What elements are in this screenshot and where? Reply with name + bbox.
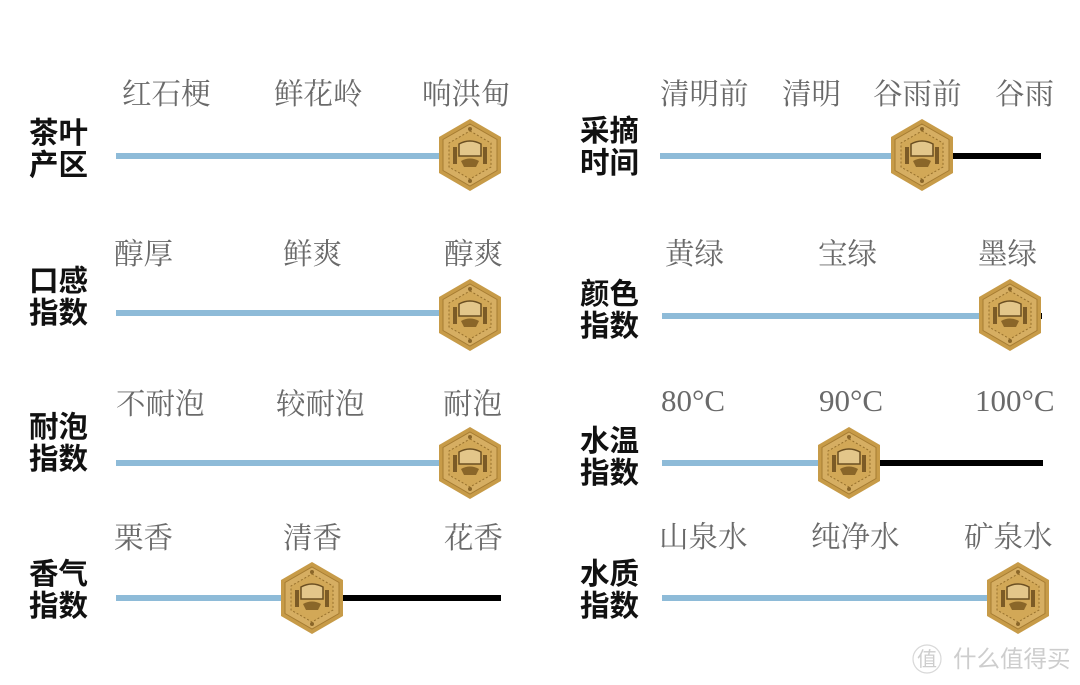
icon: badge [987,562,1049,634]
row: picking time [580,78,1054,191]
slider line: colour [662,313,1042,319]
slider line: aroma [116,595,501,601]
heading: aroma: 指数 [29,590,88,623]
options: water temperature: 80°C [661,383,725,418]
row: steeping durability [29,388,502,499]
heading: steeping durability: 指数 [29,443,88,476]
heading: colour: 指数 [580,310,639,343]
slider line: steeping durability [116,460,446,466]
icon: badge [979,279,1041,351]
options: steeping durability: 较耐泡 [276,388,365,421]
options: colour: 墨绿 [978,239,1037,271]
options: water temperature [661,383,1055,418]
options: aroma [114,522,503,555]
options: steeping durability: 耐泡 [443,388,502,421]
options: aroma: 花香 [444,522,503,555]
options: steeping durability [116,388,502,421]
options: colour: 宝绿 [818,238,877,271]
options: tea origin: 红石梗 [122,78,211,111]
options: colour [665,238,1037,271]
options: water quality: 矿泉水 [964,521,1053,554]
watermark [913,645,1070,673]
options: colour: 黄绿 [665,238,724,271]
heading: water temperature: 水温 [580,425,639,458]
heading: water quality: 水质 [580,558,639,591]
options: picking time [660,78,1054,111]
slider line: picking time [660,153,1041,159]
icon: badge [439,427,501,499]
heading: steeping durability: 耐泡 [29,411,88,444]
options: taste: 鲜爽 [283,238,342,271]
heading: tea origin: 茶叶 [29,117,88,150]
icon: badge [439,279,501,351]
options: tea origin: 鲜花岭 [274,78,363,111]
row: colour [580,238,1042,351]
slider line: taste [116,310,446,316]
options: picking time: 谷雨 [995,79,1054,111]
options: water quality: 山泉水 [659,521,748,554]
options: water quality [659,521,1053,554]
options: water temperature: 100°C [975,383,1055,418]
heading: water quality: 指数 [580,590,639,623]
options: taste [114,238,503,271]
heading: colour: 颜色 [580,278,639,311]
icon: badge [891,119,953,191]
options: aroma: 清香 [283,522,342,555]
options: aroma: 栗香 [114,522,173,555]
options: tea origin [122,78,511,111]
options: taste: 醇厚 [114,238,173,271]
row: taste [29,238,503,351]
options: picking time: 清明 [782,78,841,111]
options: picking time: 谷雨前 [873,78,962,111]
options: taste: 醇爽 [444,238,503,271]
heading: tea origin: 产区 [29,149,88,182]
options: water temperature: 90°C [819,383,883,418]
heading: picking time: 时间 [580,147,639,180]
options: picking time: 清明前 [660,78,749,111]
icon: badge [818,427,880,499]
slider line: water temperature [662,460,1043,466]
options: steeping durability: 不耐泡 [116,388,205,421]
heading: water temperature: 指数 [580,457,639,490]
icon: badge [439,119,501,191]
heading: aroma: 香气 [29,558,88,591]
slider line: water quality [662,595,997,601]
watermark: 值 [917,648,937,671]
row: water quality [580,521,1053,634]
heading: taste: 指数 [29,297,88,330]
options: water quality: 纯净水 [811,521,900,554]
slider line: tea origin [116,153,446,159]
row: aroma [29,522,503,634]
options: tea origin: 响洪甸 [422,78,511,111]
heading: picking time: 采摘 [580,115,639,148]
icon: badge [281,562,343,634]
row: tea origin [29,78,511,191]
row: water temperature [580,383,1055,499]
watermark: 什么值得买 [953,646,1070,672]
heading: taste: 口感 [29,265,88,298]
